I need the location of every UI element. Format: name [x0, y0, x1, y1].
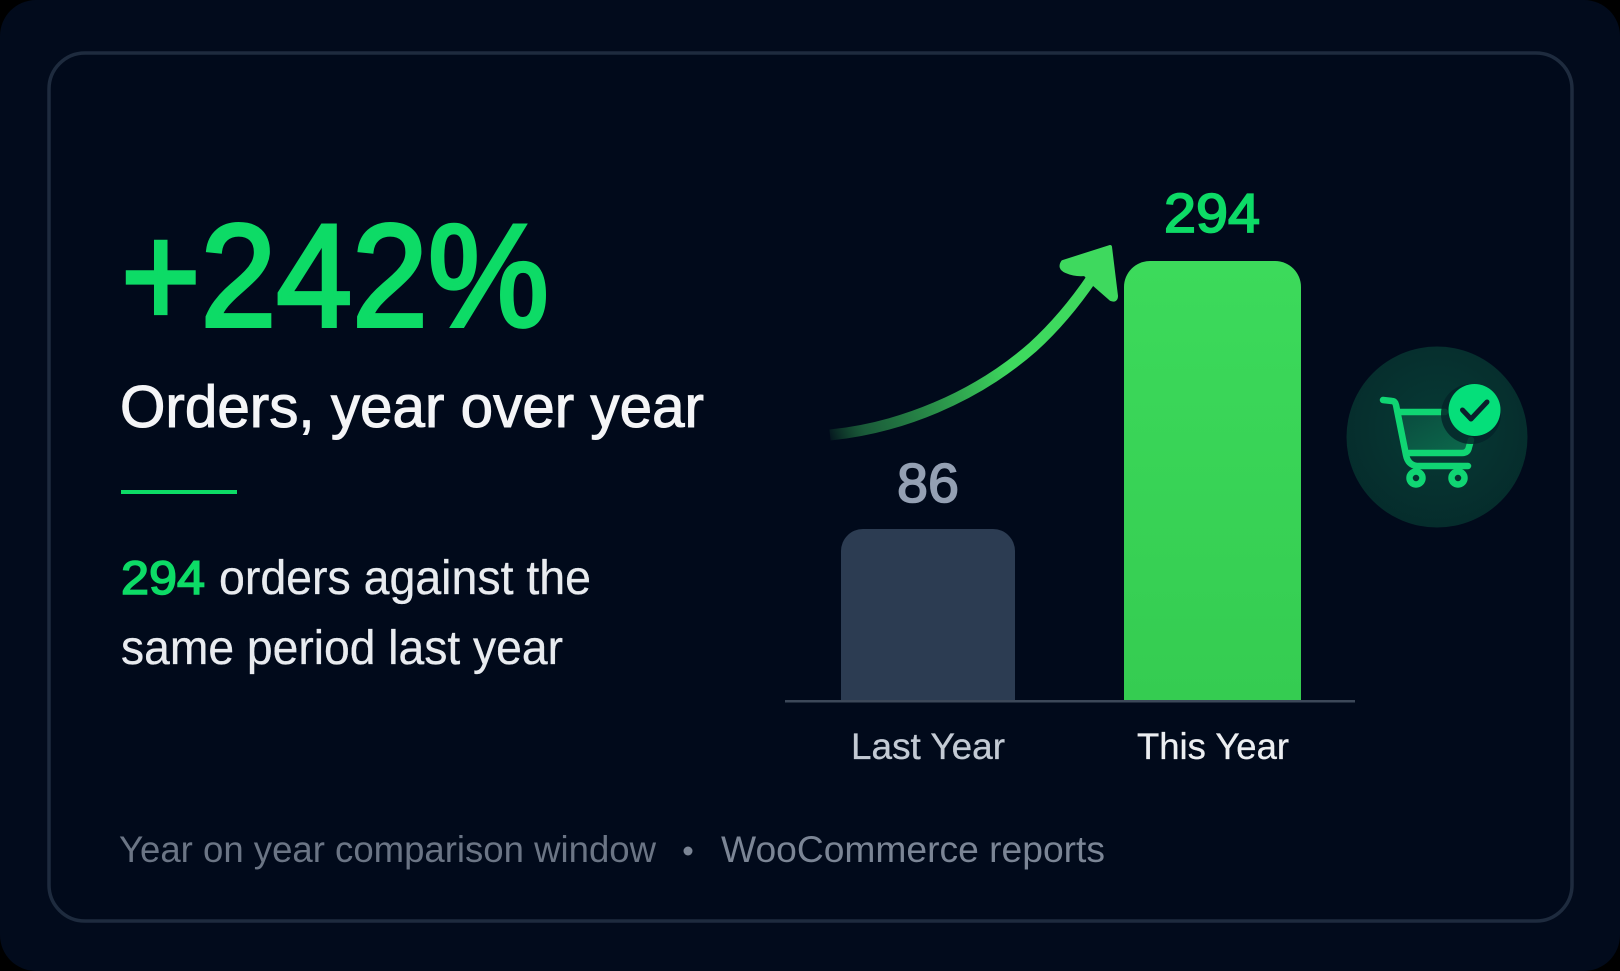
check mark	[1462, 402, 1487, 419]
icon background circle	[1346, 346, 1528, 528]
chart axis	[785, 700, 1355, 702]
check badge	[1448, 384, 1500, 436]
check badge shadow	[1441, 384, 1501, 444]
left column: headline stat and description	[120, 194, 704, 675]
footer: separator dot	[684, 846, 692, 856]
bar: this year	[1124, 261, 1301, 701]
label: last year: Last Year	[851, 726, 1005, 767]
bar chart	[785, 182, 1355, 767]
big stat: +242%: +242%	[121, 194, 549, 357]
description: highlighted number: 294	[121, 551, 205, 604]
footer: comparison window: Year on year comparison window	[119, 829, 656, 870]
value: 294: 294	[1164, 182, 1260, 244]
accent divider	[121, 490, 237, 494]
icon: shopping cart with check badge	[1346, 346, 1528, 528]
value: 86: 86	[897, 452, 959, 514]
footer: source: WooCommerce reports	[721, 829, 1105, 870]
heading: Orders, year over year	[120, 374, 704, 440]
description line 2: same period last year	[121, 622, 563, 675]
footer source line	[119, 829, 1105, 870]
label: this year: This Year	[1137, 726, 1289, 767]
growth arrow	[830, 247, 1116, 435]
description line 1: orders against the	[219, 552, 591, 605]
cart basket fill	[1398, 412, 1472, 453]
cart frame	[1383, 400, 1471, 484]
bar: last year	[841, 529, 1015, 701]
